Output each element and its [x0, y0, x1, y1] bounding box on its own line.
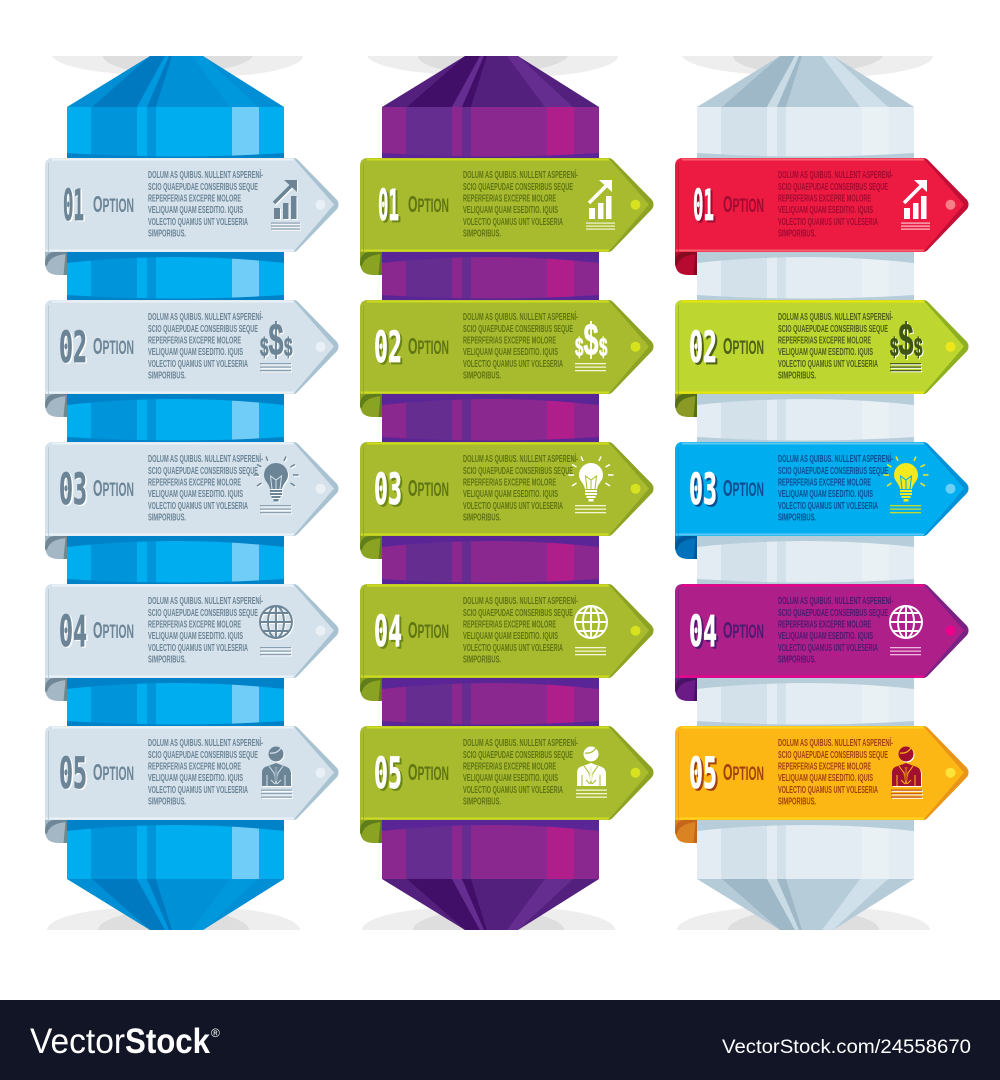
- description 01: DOLUM AS QUIBUS. NULLENT ASPERENÍ-: [778, 168, 893, 181]
- description 02: SCIO QUAEPUDAE CONSERIBUS SEQUE: [778, 323, 888, 335]
- ribbon 03 olive: 03: [374, 465, 402, 515]
- description 03: [778, 452, 893, 524]
- description 03: VELIQUAM QUAM ESEDITIO. IQUIS: [778, 488, 873, 500]
- ribbon 03 blue: 03: [691, 467, 719, 517]
- description 01: VELIQUAM QUAM ESEDITIO. IQUIS: [148, 204, 243, 216]
- ribbon 02 grey: OPTION: [93, 333, 134, 359]
- icon: globe: [890, 606, 922, 655]
- description 04: VELIQUAM QUAM ESEDITIO. IQUIS: [463, 630, 558, 642]
- description 03: DOLUM AS QUIBUS. NULLENT ASPERENÍ-: [463, 452, 578, 465]
- ribbon 02 olive: OPTION: [408, 333, 449, 359]
- description 05: DOLUM AS QUIBUS. NULLENT ASPERENÍ-: [778, 736, 893, 749]
- description 03: SIMPORIBUS.: [148, 512, 186, 524]
- ribbon 04 magenta: 04: [691, 609, 719, 659]
- ribbon 02 grey: 02: [60, 324, 88, 374]
- icon: growth chart: [586, 180, 615, 230]
- description 01: REPERFERIAS EXCEPRE MOLORE: [463, 192, 556, 204]
- icon: dollars: $: [898, 314, 914, 365]
- ribbon 02 lime: 02: [691, 325, 719, 375]
- description 02: VOLECTIO QUAMUS UNT VOLESERIA: [148, 358, 248, 370]
- icon: growth chart: [901, 180, 930, 230]
- icon: dollars: [575, 314, 608, 371]
- description 01: SIMPORIBUS.: [463, 228, 501, 240]
- icon: dollars: $: [584, 314, 598, 365]
- icon: light bulb: [568, 456, 614, 513]
- ribbon 01 grey: 01: [64, 182, 86, 232]
- icon: globe: [260, 606, 292, 655]
- icon: dollars: $: [599, 332, 608, 362]
- description 03: VELIQUAM QUAM ESEDITIO. IQUIS: [148, 488, 243, 500]
- icon: businessman: [891, 746, 922, 798]
- description 04: SIMPORIBUS.: [778, 654, 816, 666]
- ribbon 04 magenta: 04: [689, 607, 717, 657]
- description 04: SIMPORIBUS.: [463, 654, 501, 666]
- crystal: purple: [362, 56, 618, 930]
- description 01: VOLECTIO QUAMUS UNT VOLESERIA: [148, 216, 248, 228]
- description 01: DOLUM AS QUIBUS. NULLENT ASPERENÍ-: [463, 168, 578, 181]
- ribbon 01 grey: 01: [63, 181, 84, 231]
- ribbon 05 grey: [45, 726, 338, 843]
- description 01: SCIO QUAEPUDAE CONSERIBUS SEQUE: [463, 181, 573, 193]
- description 04: VOLECTIO QUAMUS UNT VOLESERIA: [148, 642, 248, 654]
- ribbon 02 grey: [45, 300, 338, 417]
- crystal: blue: [47, 56, 303, 930]
- footer banner: [0, 1000, 1000, 1080]
- icon: light bulb: [884, 456, 928, 513]
- ribbon 01 olive: 01: [380, 183, 401, 233]
- ribbon 04 grey: [45, 584, 338, 701]
- description 02: REPERFERIAS EXCEPRE MOLORE: [148, 334, 241, 346]
- icon: dollars: $: [260, 332, 269, 362]
- description 02: VELIQUAM QUAM ESEDITIO. IQUIS: [778, 346, 873, 358]
- description 04: DOLUM AS QUIBUS. NULLENT ASPERENÍ-: [463, 594, 578, 607]
- ribbon 01 red: [675, 158, 968, 275]
- ribbon 05 amber: OPTION: [723, 759, 764, 785]
- column 2: purple crystal with olive ribbons: [360, 56, 654, 930]
- description 02: SIMPORIBUS.: [778, 370, 816, 382]
- description 04: DOLUM AS QUIBUS. NULLENT ASPERENÍ-: [778, 594, 893, 607]
- description 03: DOLUM AS QUIBUS. NULLENT ASPERENÍ-: [778, 452, 893, 465]
- description 03: SCIO QUAEPUDAE CONSERIBUS SEQUE: [463, 465, 573, 477]
- description 05: VOLECTIO QUAMUS UNT VOLESERIA: [463, 784, 563, 796]
- description 05: [463, 736, 578, 808]
- footer banner: Stock: [125, 1022, 210, 1061]
- description 04: DOLUM AS QUIBUS. NULLENT ASPERENÍ-: [148, 594, 263, 607]
- ribbon 04 grey: 04: [59, 607, 87, 657]
- description 03: SCIO QUAEPUDAE CONSERIBUS SEQUE: [778, 465, 888, 477]
- description 04: VELIQUAM QUAM ESEDITIO. IQUIS: [778, 630, 873, 642]
- description 03: VOLECTIO QUAMUS UNT VOLESERIA: [463, 500, 563, 512]
- description 02: SIMPORIBUS.: [463, 370, 501, 382]
- ribbon 03 olive: 03: [376, 467, 404, 517]
- ribbon 03 grey: 03: [60, 466, 88, 516]
- description 05: VELIQUAM QUAM ESEDITIO. IQUIS: [778, 772, 873, 784]
- description 02: VOLECTIO QUAMUS UNT VOLESERIA: [778, 358, 878, 370]
- description 03: VOLECTIO QUAMUS UNT VOLESERIA: [778, 500, 878, 512]
- ribbon 01 olive: 01: [378, 181, 399, 231]
- description 03: [463, 452, 578, 524]
- icon: dollars: $: [575, 332, 584, 362]
- description 02: [463, 310, 578, 382]
- icon: dollars: [260, 314, 293, 371]
- description 02: [778, 310, 893, 382]
- icon: dollars: $: [890, 332, 899, 362]
- description 02: SCIO QUAEPUDAE CONSERIBUS SEQUE: [148, 323, 258, 335]
- ribbon 04 magenta: OPTION: [723, 617, 764, 643]
- description 04: VOLECTIO QUAMUS UNT VOLESERIA: [463, 642, 563, 654]
- ribbon 03 grey: OPTION: [93, 475, 134, 501]
- column 1: blue crystal with grey ribbons: [45, 56, 338, 930]
- ribbon 01 red: 01: [693, 181, 714, 231]
- description 03: REPERFERIAS EXCEPRE MOLORE: [778, 476, 871, 488]
- ribbon 05 amber: 05: [691, 751, 719, 801]
- description 03: REPERFERIAS EXCEPRE MOLORE: [463, 476, 556, 488]
- description 04: [463, 594, 578, 666]
- description 01: [778, 168, 893, 240]
- ribbon 01 grey: [45, 158, 338, 275]
- description 02: DOLUM AS QUIBUS. NULLENT ASPERENÍ-: [148, 310, 263, 323]
- description 04: SCIO QUAEPUDAE CONSERIBUS SEQUE: [778, 607, 888, 619]
- description 01: REPERFERIAS EXCEPRE MOLORE: [148, 192, 241, 204]
- description 03: DOLUM AS QUIBUS. NULLENT ASPERENÍ-: [148, 452, 263, 465]
- ribbon 05 grey: OPTION: [93, 759, 134, 785]
- ribbon 03 olive: OPTION: [408, 475, 449, 501]
- ribbon 05 olive: 05: [376, 751, 404, 801]
- footer banner: VectorStock.com/24558670: [722, 1036, 971, 1058]
- ribbon 04 magenta: [675, 584, 968, 701]
- description 05: VELIQUAM QUAM ESEDITIO. IQUIS: [463, 772, 558, 784]
- description 05: VOLECTIO QUAMUS UNT VOLESERIA: [148, 784, 248, 796]
- ribbon 05 olive: 05: [374, 749, 402, 799]
- ribbon 03 blue: [675, 442, 968, 559]
- ribbon 05 olive: [360, 726, 654, 843]
- ribbon 03 blue: OPTION: [723, 475, 764, 501]
- description 01: [148, 168, 263, 240]
- icon: businessman: [576, 746, 607, 798]
- description 02: DOLUM AS QUIBUS. NULLENT ASPERENÍ-: [778, 310, 893, 323]
- description 04: SCIO QUAEPUDAE CONSERIBUS SEQUE: [148, 607, 258, 619]
- description 01: DOLUM AS QUIBUS. NULLENT ASPERENÍ-: [148, 168, 263, 181]
- description 05: SIMPORIBUS.: [148, 796, 186, 808]
- description 01: SIMPORIBUS.: [148, 228, 186, 240]
- description 03: REPERFERIAS EXCEPRE MOLORE: [148, 476, 241, 488]
- description 05: SCIO QUAEPUDAE CONSERIBUS SEQUE: [778, 749, 888, 761]
- ribbon 01 olive: OPTION: [408, 191, 449, 217]
- ribbon 03 grey: [45, 442, 338, 559]
- icon: growth chart: [271, 180, 300, 230]
- description 03: [148, 452, 263, 524]
- description 03: SIMPORIBUS.: [463, 512, 501, 524]
- ribbon 02 olive: [360, 300, 654, 417]
- description 04: SCIO QUAEPUDAE CONSERIBUS SEQUE: [463, 607, 573, 619]
- description 05: SIMPORIBUS.: [778, 796, 816, 808]
- ribbon 01 red: OPTION: [723, 191, 764, 217]
- description 01: VOLECTIO QUAMUS UNT VOLESERIA: [778, 216, 878, 228]
- description 02: SIMPORIBUS.: [148, 370, 186, 382]
- description 03: VOLECTIO QUAMUS UNT VOLESERIA: [148, 500, 248, 512]
- ribbon 01 red: 01: [695, 183, 716, 233]
- description 05: REPERFERIAS EXCEPRE MOLORE: [463, 760, 556, 772]
- description 02: REPERFERIAS EXCEPRE MOLORE: [778, 334, 871, 346]
- ribbon 04 grey: OPTION: [93, 617, 134, 643]
- ribbon 04 grey: 04: [60, 608, 88, 658]
- description 04: [778, 594, 893, 666]
- description 03: SCIO QUAEPUDAE CONSERIBUS SEQUE: [148, 465, 258, 477]
- ribbon 04 olive: 04: [374, 607, 402, 657]
- ribbon 03 olive: [360, 442, 654, 559]
- ribbon 01 olive: [360, 158, 654, 275]
- description 04: VELIQUAM QUAM ESEDITIO. IQUIS: [148, 630, 243, 642]
- icon: businessman: [261, 746, 292, 798]
- ribbon 02 lime: 02: [689, 323, 717, 373]
- description 01: SCIO QUAEPUDAE CONSERIBUS SEQUE: [148, 181, 258, 193]
- column 3: pale crystal with multicolour ribbons: [675, 56, 968, 930]
- icon: dollars: $: [914, 332, 923, 362]
- description 01: VELIQUAM QUAM ESEDITIO. IQUIS: [463, 204, 558, 216]
- description 04: REPERFERIAS EXCEPRE MOLORE: [778, 618, 871, 630]
- ribbon 02 grey: 02: [59, 323, 87, 373]
- ribbon 04 olive: [360, 584, 654, 701]
- ribbon 02 lime: OPTION: [723, 333, 764, 359]
- description 05: SIMPORIBUS.: [463, 796, 501, 808]
- description 05: SCIO QUAEPUDAE CONSERIBUS SEQUE: [463, 749, 573, 761]
- description 01: [463, 168, 578, 240]
- description 03: VELIQUAM QUAM ESEDITIO. IQUIS: [463, 488, 558, 500]
- description 02: VELIQUAM QUAM ESEDITIO. IQUIS: [463, 346, 558, 358]
- description 05: [148, 736, 263, 808]
- description 05: VOLECTIO QUAMUS UNT VOLESERIA: [778, 784, 878, 796]
- description 01: VELIQUAM QUAM ESEDITIO. IQUIS: [778, 204, 873, 216]
- ribbon 05 amber: [675, 726, 968, 843]
- ribbon 05 grey: 05: [59, 749, 87, 799]
- crystal: pale grey-blue: [677, 56, 933, 930]
- description 01: SIMPORIBUS.: [778, 228, 816, 240]
- description 04: [148, 594, 263, 666]
- description 05: REPERFERIAS EXCEPRE MOLORE: [148, 760, 241, 772]
- description 01: VOLECTIO QUAMUS UNT VOLESERIA: [463, 216, 563, 228]
- description 02: SCIO QUAEPUDAE CONSERIBUS SEQUE: [463, 323, 573, 335]
- description 04: VOLECTIO QUAMUS UNT VOLESERIA: [778, 642, 878, 654]
- description 02: VELIQUAM QUAM ESEDITIO. IQUIS: [148, 346, 243, 358]
- description 05: VELIQUAM QUAM ESEDITIO. IQUIS: [148, 772, 243, 784]
- icon: light bulb: [254, 456, 298, 513]
- ribbon 02 lime: [675, 300, 968, 417]
- ribbon 05 olive: OPTION: [408, 759, 449, 785]
- description 04: REPERFERIAS EXCEPRE MOLORE: [148, 618, 241, 630]
- ribbon 03 grey: 03: [59, 465, 87, 515]
- ribbon 05 grey: 05: [60, 750, 88, 800]
- ribbon 04 olive: OPTION: [408, 617, 449, 643]
- description 02: DOLUM AS QUIBUS. NULLENT ASPERENÍ-: [463, 310, 578, 323]
- description 01: REPERFERIAS EXCEPRE MOLORE: [778, 192, 871, 204]
- ribbon 01 grey: OPTION: [93, 191, 134, 217]
- description 04: REPERFERIAS EXCEPRE MOLORE: [463, 618, 556, 630]
- footer banner: Vector: [30, 1022, 125, 1061]
- description 02: REPERFERIAS EXCEPRE MOLORE: [463, 334, 556, 346]
- description 05: DOLUM AS QUIBUS. NULLENT ASPERENÍ-: [463, 736, 578, 749]
- ribbon 02 olive: 02: [374, 323, 402, 373]
- description 05: SCIO QUAEPUDAE CONSERIBUS SEQUE: [148, 749, 258, 761]
- description 02: [148, 310, 263, 382]
- description 05: DOLUM AS QUIBUS. NULLENT ASPERENÍ-: [148, 736, 263, 749]
- icon: dollars: $: [284, 332, 293, 362]
- description 04: SIMPORIBUS.: [148, 654, 186, 666]
- description 02: VOLECTIO QUAMUS UNT VOLESERIA: [463, 358, 563, 370]
- description 01: SCIO QUAEPUDAE CONSERIBUS SEQUE: [778, 181, 888, 193]
- icon: globe: [575, 606, 607, 655]
- ribbon 04 olive: 04: [376, 609, 404, 659]
- footer banner: ®: [211, 1026, 220, 1040]
- ribbon 02 olive: 02: [376, 325, 404, 375]
- description 05: REPERFERIAS EXCEPRE MOLORE: [778, 760, 871, 772]
- description 05: [778, 736, 893, 808]
- icon: dollars: [890, 314, 923, 371]
- ribbon 05 amber: 05: [689, 749, 717, 799]
- icon: dollars: $: [268, 314, 284, 365]
- description 03: SIMPORIBUS.: [778, 512, 816, 524]
- ribbon 03 blue: 03: [689, 465, 717, 515]
